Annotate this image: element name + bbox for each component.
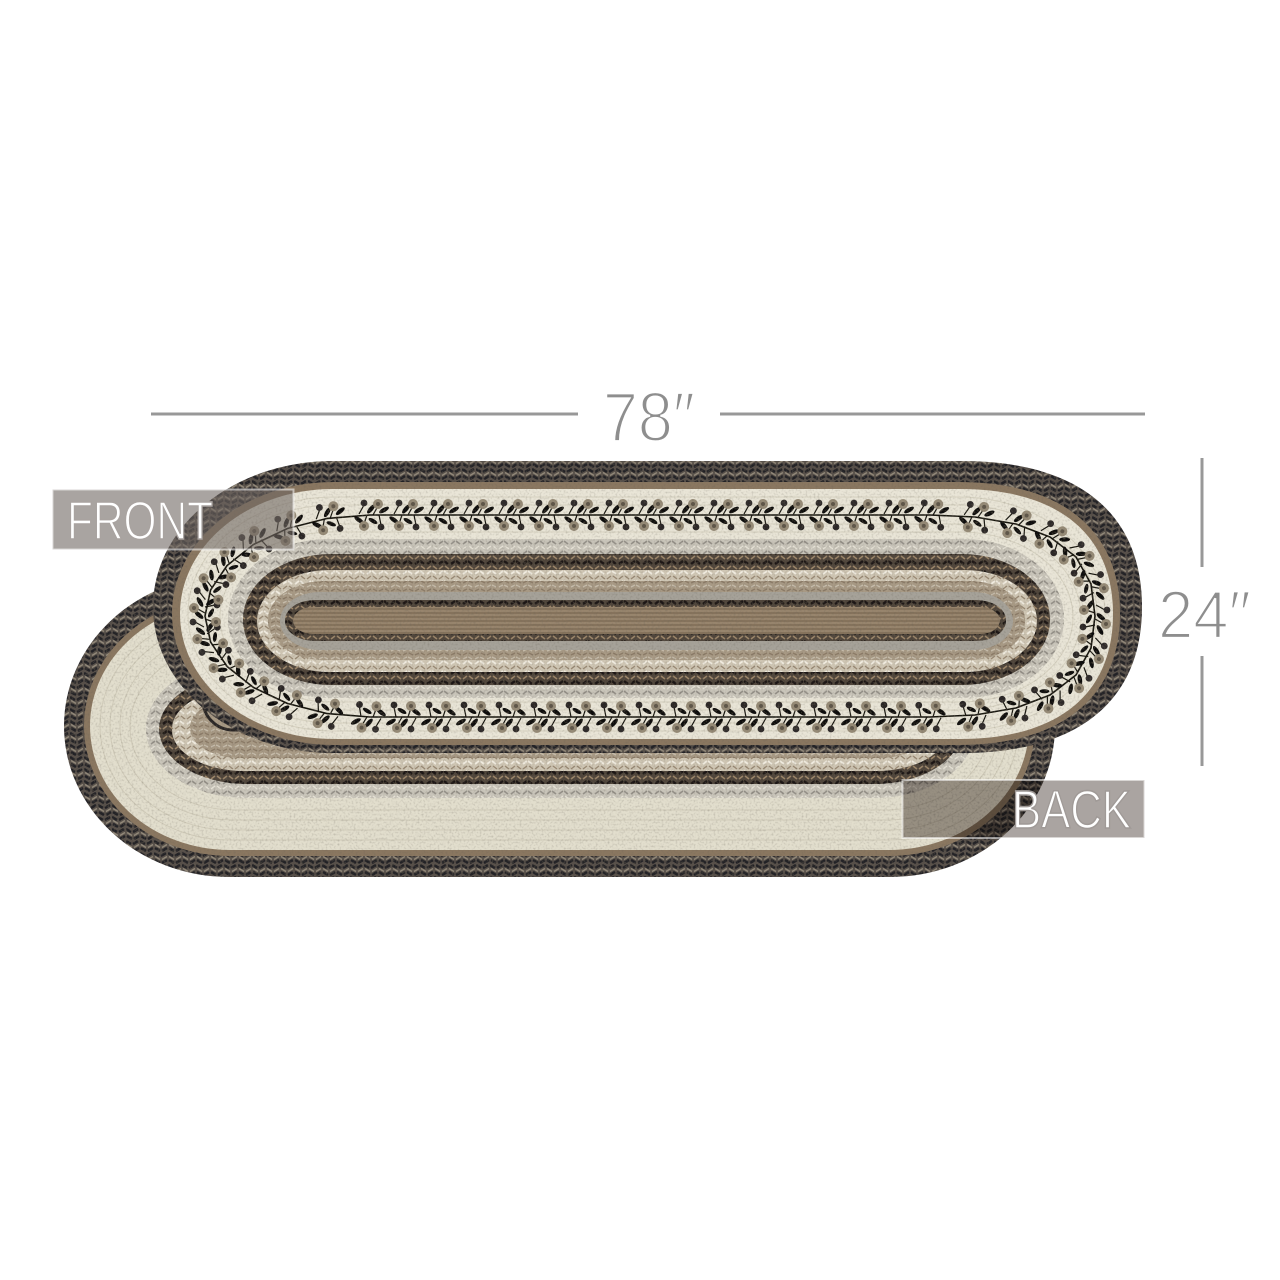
label: back: BACK	[1012, 780, 1131, 840]
rug: front side	[153, 461, 1142, 753]
label: front: FRONT	[67, 491, 213, 551]
width dimension: 78 inches: 78″	[603, 378, 695, 456]
floral vine border	[205, 515, 1095, 717]
label: back	[902, 780, 1144, 840]
width dimension: 78 inches	[151, 378, 1145, 456]
rug: back side	[64, 575, 1055, 877]
height dimension: 24 inches	[1158, 458, 1251, 766]
height dimension: 24 inches: 24″	[1158, 577, 1251, 653]
